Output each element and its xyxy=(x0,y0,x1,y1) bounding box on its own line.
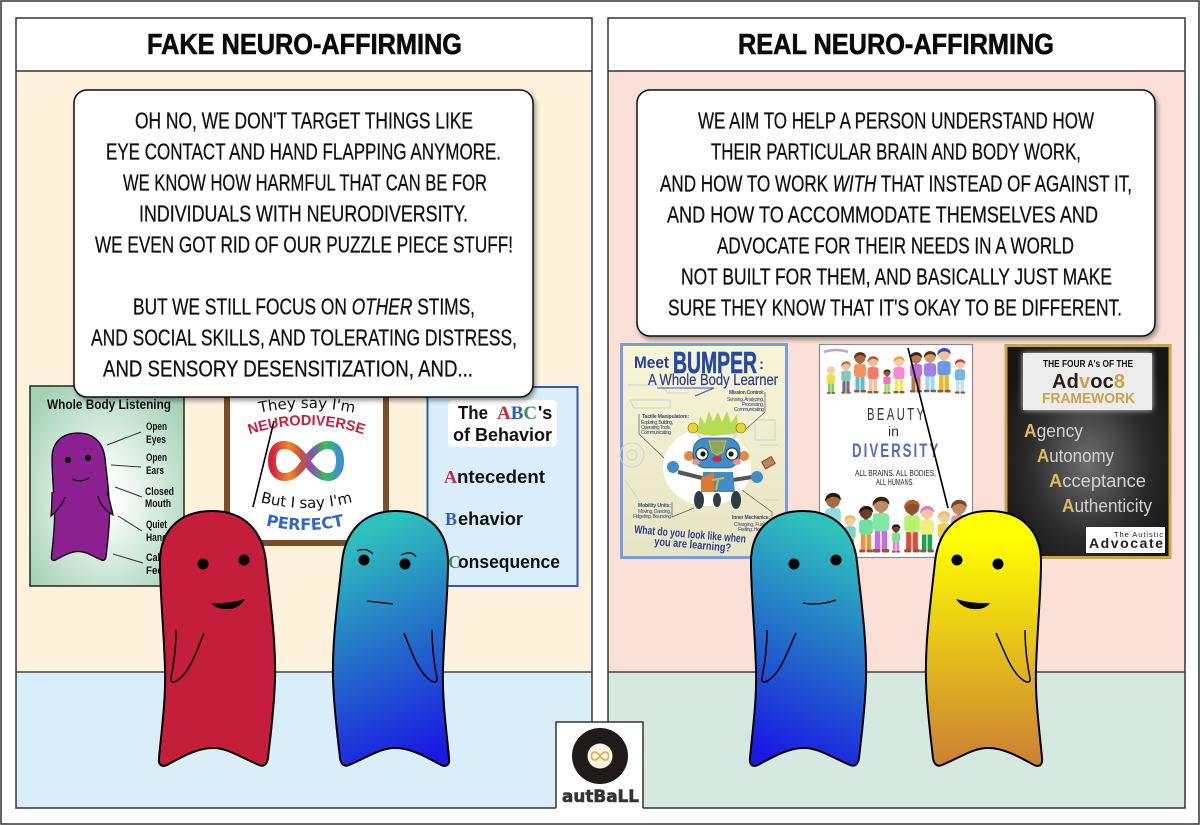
poster: meet bumper: BUMPER xyxy=(673,345,757,380)
poster: four A's of the Advoc8 framework: Agency xyxy=(1024,420,1084,441)
speech bubble: fake: OH NO, WE DON'T TARGET THINGS LIKE xyxy=(135,108,473,134)
labels: bumper callouts: Operating Tools, xyxy=(641,425,671,431)
poster: the ABC's of behavior: ABC xyxy=(497,403,537,424)
poster: four A's of the Advoc8 framework: Autonomy xyxy=(1037,445,1115,466)
poster: beauty in diversity: in xyxy=(888,423,899,439)
labels: listening parts: Calm xyxy=(146,552,168,564)
poster: four A's of the Advoc8 framework: THE FOUR A's OF THE xyxy=(1043,359,1133,370)
text: what do you look like when you are learning: you are learning? xyxy=(654,536,731,555)
character: yellow ghost smiling xyxy=(926,511,1042,766)
poster: they say I'm neurodiverse xyxy=(224,398,389,546)
speech bubble: fake: BUT WE STILL FOCUS ON OTHER STIMS, xyxy=(133,294,475,320)
poster: the ABC's of behavior: of Behavior xyxy=(453,425,552,445)
poster: four A's of the Advoc8 framework: Advoc8 xyxy=(1052,371,1125,393)
illustration: bottom row of people xyxy=(825,493,967,554)
poster: meet bumper: : xyxy=(759,356,764,373)
poster: meet bumper: A Whole Body Learner xyxy=(648,372,779,389)
speech bubble: fake: EYE CONTACT AND HAND FLAPPING ANYMORE. xyxy=(106,138,501,164)
speech bubble: fake: WE EVEN GOT RID OF OUR PUZZLE PIECE STUFF! xyxy=(95,232,513,258)
poster: the ABC's of behavior: The xyxy=(458,403,488,423)
labels: bumper callouts: Tactile Manipulators: xyxy=(642,414,689,420)
labels: listening parts: Ears xyxy=(146,465,164,477)
poster: beauty in diversity: ALL HUMANS. xyxy=(876,478,914,487)
poster: four A's of the Advoc8 framework xyxy=(1006,346,1170,558)
poster: they say I'm neurodiverse: PERFECT xyxy=(267,514,342,530)
labels: bumper callouts: Communicating xyxy=(734,407,764,413)
poster: they say I'm neurodiverse: NEURODIVERSE xyxy=(248,415,366,434)
labels: bumper callouts: Moving, Dancing, xyxy=(638,509,671,515)
poster: four A's of the Advoc8 framework: The Autistic xyxy=(1114,530,1163,539)
poster: they say I'm neurodiverse: But I say I'm xyxy=(262,492,352,511)
text: what do you look like when you are learning: What do you look like when xyxy=(634,524,746,546)
poster: four A's of the Advoc8 framework: Acceptance xyxy=(1049,470,1146,491)
labels: listening parts xyxy=(145,421,174,577)
labels: bumper callouts: Processing, xyxy=(742,402,764,408)
character: red ghost smiling xyxy=(159,511,275,766)
logo: autball: autBaLL xyxy=(562,787,639,807)
panel: fake neuro-affirming xyxy=(15,17,593,809)
labels: bumper callouts: Inner Mechanics: xyxy=(732,515,770,521)
poster: four A's of the Advoc8 framework: FRAMEWORK xyxy=(1042,390,1135,407)
labels: listening parts: Hands xyxy=(146,532,172,544)
poster: the ABC's of behavior xyxy=(428,387,578,586)
labels: listening parts: Eyes xyxy=(146,434,166,446)
poster: four A's of the Advoc8 framework: Authenticity xyxy=(1062,495,1153,516)
speech bubble: fake: AND SOCIAL SKILLS, AND TOLERATING DISTRESS, xyxy=(91,324,517,350)
poster: four A's of the Advoc8 framework: Advocate xyxy=(1089,535,1163,551)
poster: meet bumper xyxy=(620,344,786,558)
logo: autball xyxy=(556,722,643,810)
poster: the ABC's of behavior: 's xyxy=(538,403,552,423)
labels: listening parts: Closed xyxy=(145,486,174,498)
labels: bumper callouts: Mission Control: xyxy=(729,390,764,396)
poster: beauty in diversity xyxy=(820,344,972,558)
speech bubble: fake: AND SENSORY DESENSITIZATION, AND... xyxy=(103,356,473,382)
poster: meet bumper: Meet xyxy=(634,353,669,372)
labels: bumper callouts: Sensing, Analyzing, xyxy=(727,397,764,403)
poster: the ABC's of behavior: ehavior xyxy=(458,509,523,529)
labels: bumper callouts: Mobility Units: xyxy=(638,503,671,509)
labels: bumper callouts: Feeling, Healing xyxy=(738,527,768,533)
poster: the ABC's of behavior: B xyxy=(445,509,457,529)
poster: the ABC's of behavior: onsequence xyxy=(458,552,560,572)
panel: real neuro-affirming xyxy=(608,18,1185,808)
poster: beauty in diversity: DIVERSITY xyxy=(852,439,940,462)
speech bubble: fake: WE KNOW HOW HARMFUL THAT CAN BE FOR xyxy=(123,170,487,196)
character: blue ghost content xyxy=(750,511,866,766)
poster: whole body listening xyxy=(30,386,184,586)
labels: listening parts: Feet xyxy=(146,565,166,577)
icon: bumper robot xyxy=(663,411,775,509)
heading: real neuro-affirming: REAL NEURO-AFFIRMING xyxy=(738,29,1054,61)
illustration: top row of people xyxy=(827,348,965,394)
labels: bumper callouts xyxy=(633,390,772,533)
speech bubble: real xyxy=(637,90,1155,336)
labels: listening parts: Quiet xyxy=(146,519,167,531)
heading: fake neuro-affirming: FAKE NEURO-AFFIRMING xyxy=(147,29,462,61)
labels: bumper callouts: Exploring, Building, xyxy=(641,420,673,426)
labels: bumper callouts: Communicating xyxy=(641,430,671,436)
poster: the ABC's of behavior: ntecedent xyxy=(457,467,545,487)
labels: listening parts: Mouth xyxy=(145,498,171,510)
icon: rainbow infinity xyxy=(272,445,340,477)
text: what do you look like when you are learning xyxy=(634,524,746,555)
speech bubble: real: ADVOCATE FOR THEIR NEEDS IN A WORLD xyxy=(717,232,1074,258)
poster: the ABC's of behavior: A xyxy=(444,467,457,487)
poster: beauty in diversity: BEAUTY xyxy=(867,404,927,425)
speech bubble: fake xyxy=(74,90,533,397)
labels: bumper callouts: Fidgeting, Bouncing xyxy=(633,514,671,520)
poster: whole body listening: Whole Body Listening xyxy=(47,396,171,412)
icon: purple figure xyxy=(51,433,113,560)
poster: beauty in diversity: ALL BRAINS. ALL BODIES, xyxy=(855,469,936,478)
speech bubble: fake: INDIVIDUALS WITH NEURODIVERSITY. xyxy=(139,200,468,226)
poster: the ABC's of behavior: C xyxy=(448,552,461,572)
labels: listening parts: Open xyxy=(146,452,167,464)
labels: bumper callouts: Charging, Fueling, xyxy=(734,522,772,528)
character: blue ghost skeptical xyxy=(333,511,449,766)
poster: they say I'm neurodiverse: They say I'm xyxy=(258,398,354,412)
labels: listening parts: Open xyxy=(146,421,167,433)
